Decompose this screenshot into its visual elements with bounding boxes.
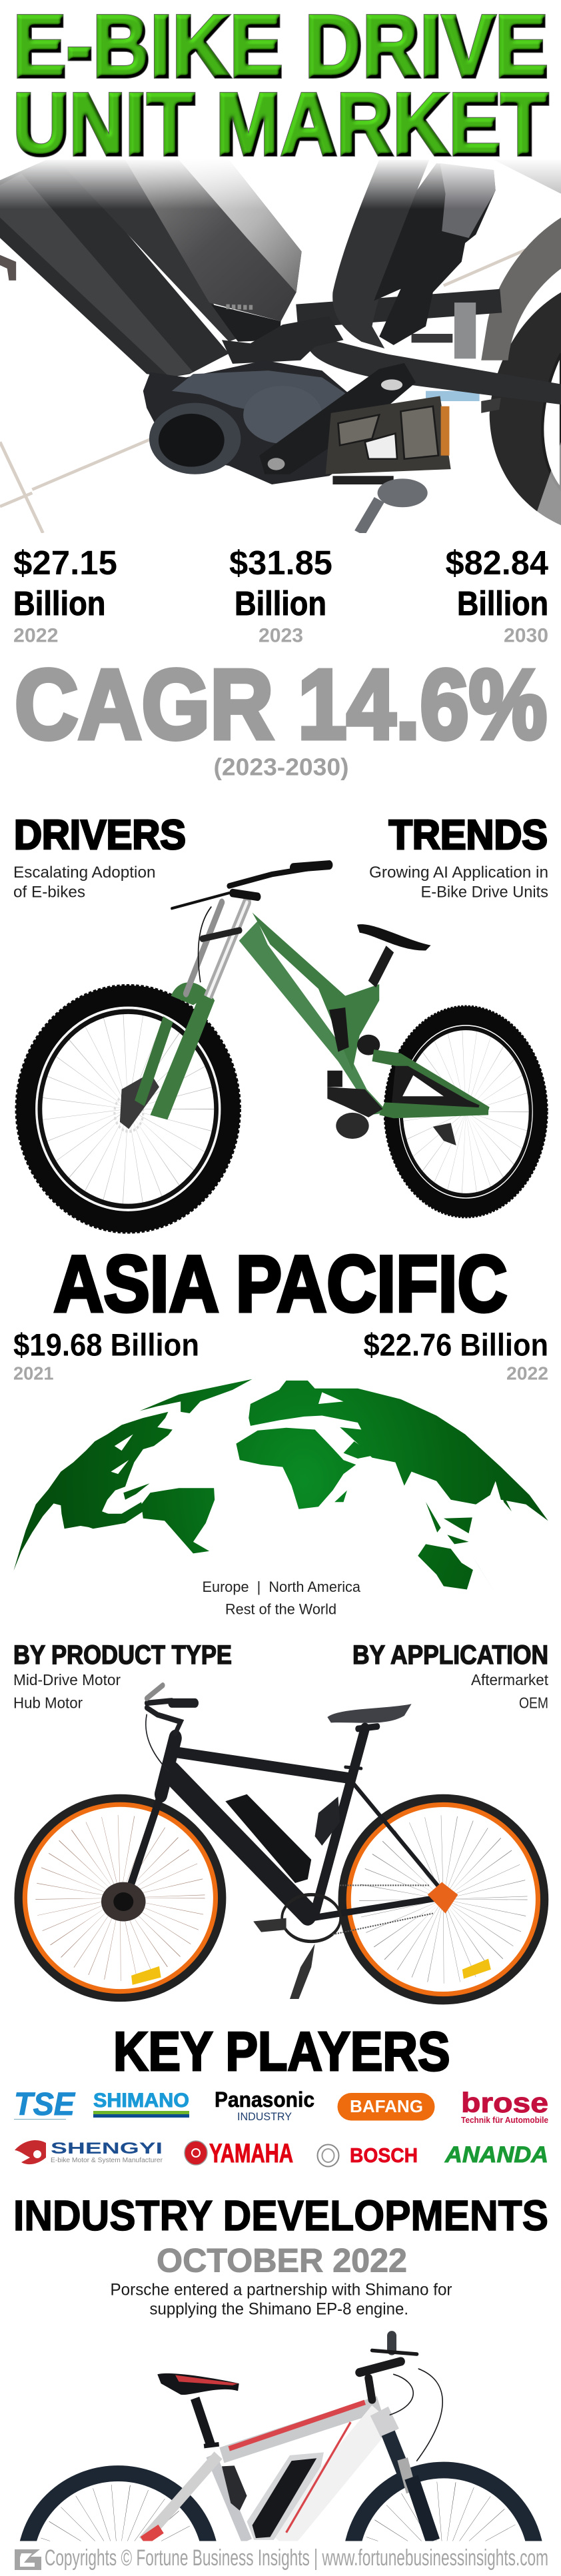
saddle <box>327 1704 412 1723</box>
other regions <box>203 1579 361 1618</box>
title <box>13 0 548 173</box>
logo: Bafang <box>337 2093 434 2120</box>
handlebar and cables <box>360 2335 442 2461</box>
stat: 2023 market size: $31.85 <box>229 544 332 582</box>
black and orange e-bike illustration <box>19 1685 544 2000</box>
segment: by product type: Hub Motor <box>13 1694 83 1711</box>
segment: by product type: Mid-Drive Motor <box>13 1671 121 1688</box>
logo: TSE: TSE <box>14 2087 76 2122</box>
footer logo <box>15 2549 41 2570</box>
development date: OCTOBER 2022 <box>157 2242 407 2279</box>
silver e-bike illustration <box>20 2331 542 2541</box>
segment: by product type <box>13 1640 232 1711</box>
development description: supplying the Shimano EP-8 engine. <box>149 2300 408 2319</box>
reflectors <box>131 1959 491 1985</box>
logo: Yamaha: YAMAHA <box>209 2139 293 2168</box>
logo: Shimano: SHIMANO <box>93 2090 189 2112</box>
trends text: Growing AI Application in <box>369 864 548 882</box>
segment: by application: Aftermarket <box>471 1671 549 1688</box>
logo: Shengyi: E-bike Motor & System Manufacturer <box>51 2157 163 2164</box>
logo: Panasonic Industry: INDUSTRY <box>237 2110 292 2123</box>
saddle <box>157 2373 239 2395</box>
heading: key players: KEY PLAYERS <box>113 2020 450 2082</box>
stat: 2022 market size: $27.15 <box>13 544 117 582</box>
front wheel <box>18 987 239 1231</box>
other regions: Europe | North America <box>203 1579 361 1595</box>
logo: Ananda: ANANDA <box>444 2142 548 2168</box>
world map <box>13 1379 548 1591</box>
drivers heading: DRIVERS <box>14 812 186 858</box>
other regions: Rest of the World <box>225 1601 336 1618</box>
footer <box>15 2545 548 2571</box>
trends text: E-Bike Drive Units <box>421 884 548 901</box>
segment: by product type: BY PRODUCT TYPE <box>13 1640 232 1670</box>
trends heading: TRENDS <box>389 812 548 858</box>
rear wheel <box>386 1008 546 1215</box>
frame <box>143 2398 433 2541</box>
segment: by application: OEM <box>519 1694 548 1711</box>
development description <box>111 2280 452 2319</box>
trends text <box>369 864 548 901</box>
frame <box>125 1726 447 1918</box>
region stat 2021: $19.68 Billion <box>13 1327 199 1362</box>
logo: Panasonic Industry <box>215 2088 314 2123</box>
logo: Panasonic Industry: Panasonic <box>215 2088 314 2112</box>
rear wheel <box>20 2465 217 2541</box>
saddle <box>357 924 431 984</box>
CAGR period: (2023-2030) <box>213 753 349 781</box>
rear bag <box>315 1796 340 1846</box>
stat: 2030 market size: $82.84 <box>445 544 549 582</box>
region stat 2022: $22.76 Billion <box>364 1327 548 1362</box>
front wheel <box>345 2461 542 2541</box>
region stat 2021: 2021 <box>13 1363 53 1383</box>
stat: 2022 market size: 2022 <box>13 625 59 646</box>
stat: 2030 market size: 2030 <box>504 625 548 646</box>
stat: 2030 market size: Billion <box>457 584 548 622</box>
battery <box>225 1794 311 1883</box>
logo: Brose: Technik für Automobile <box>461 2115 548 2125</box>
front wheel <box>19 1798 222 1998</box>
segment: by application <box>352 1640 549 1711</box>
green mountain bike illustration <box>18 865 546 1231</box>
key player logos <box>14 2087 548 2168</box>
logo: Bafang: BAFANG <box>350 2096 423 2116</box>
handlebar and controls <box>146 1685 195 1771</box>
development description: Porsche entered a partnership with Shimano for <box>111 2280 452 2299</box>
region stat 2021 <box>13 1327 199 1383</box>
stat: 2030 market size <box>445 544 549 646</box>
battery <box>247 2452 324 2540</box>
drivers text: Escalating Adoption <box>13 864 156 882</box>
drivers text <box>13 864 156 901</box>
region stat 2022: 2022 <box>506 1363 548 1383</box>
frame <box>115 913 490 1145</box>
bag <box>222 2465 247 2511</box>
stat: 2023 market size: 2023 <box>259 625 303 646</box>
logo: Brose: brose <box>461 2087 548 2118</box>
region stat 2022 <box>364 1327 548 1383</box>
stat: 2023 market size: Billion <box>235 584 326 622</box>
handlebar <box>172 865 329 981</box>
logo: Yamaha <box>185 2139 293 2168</box>
fork stanchions <box>151 902 247 1119</box>
logo: Shengyi <box>15 2140 163 2164</box>
rear wheel <box>342 1798 544 2000</box>
logo: Shengyi: SHENGYI <box>51 2140 163 2158</box>
logo: Bosch: BOSCH <box>350 2144 418 2167</box>
hero photo: e-bike drive unit <box>0 158 561 533</box>
stat: 2022 market size <box>13 544 117 646</box>
stat: 2022 market size: Billion <box>13 584 105 622</box>
drivers text: of E-bikes <box>13 884 85 901</box>
logo: Bosch <box>317 2144 418 2167</box>
stat: 2023 market size <box>229 544 332 646</box>
